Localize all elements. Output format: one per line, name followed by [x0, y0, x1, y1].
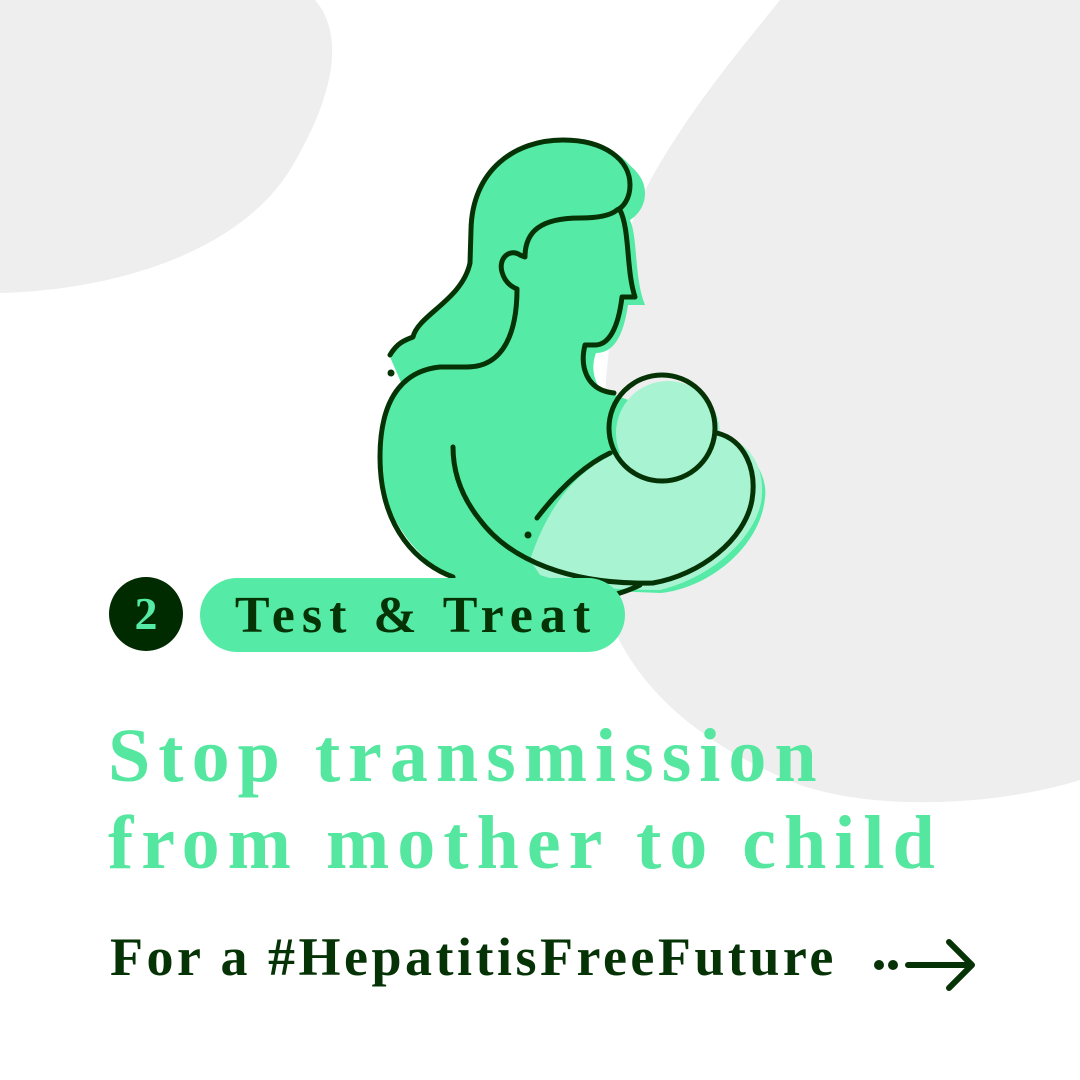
pill label: Test & Treat [200, 578, 625, 652]
headline [108, 714, 943, 885]
baby [530, 381, 762, 590]
arrow [874, 939, 975, 991]
number badge: 2 [134, 588, 158, 639]
headline: from mother to child [108, 801, 943, 885]
number badge [109, 577, 183, 651]
tagline: For a #HepatitisFreeFuture [110, 927, 837, 987]
pill label: Test & Treat: Test & Treat [235, 587, 597, 644]
headline: Stop transmission [108, 714, 825, 798]
